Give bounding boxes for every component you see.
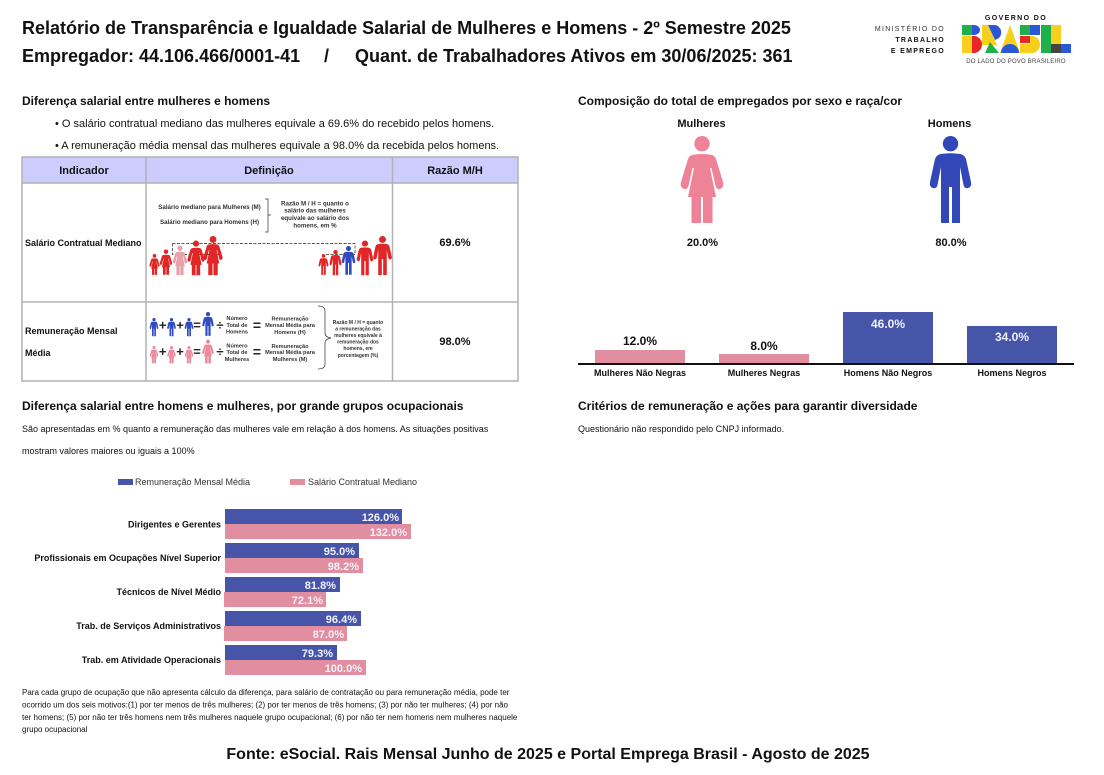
text: explicação: mostram valores maiores ou iguais a 100% (22, 446, 195, 456)
panel: composição (578, 94, 1074, 378)
table: indicadores: Remuneração Mensal (25, 326, 118, 336)
diagram: remuneração média: Mulheres (225, 357, 249, 363)
logo: Governo do Brasil (962, 15, 1071, 65)
bar chart: sexo e raça: 46.0% (871, 317, 905, 331)
logo: Ministério do Trabalho e Emprego: MINISTÉRIO DO (875, 24, 945, 33)
diagram: remuneração média: + (176, 318, 184, 332)
bar chart: sexo e raça: 12.0% (623, 334, 657, 348)
diagram: remuneração média: = (253, 344, 261, 360)
text: nota de rodapé (22, 688, 518, 734)
title: Relatório de Transparência e Igualdade Salarial de Mulheres e Homens - 2º Semestre 2025 (22, 18, 791, 38)
logo: Governo do Brasil: GOVERNO DO (985, 15, 1047, 22)
title: / (324, 46, 329, 66)
text: nota de rodapé: ocorrido um dos seis motivos:(1) por ter menos de três mulheres; (2) por ter menos de três homens; (3) por não ter mulheres; (4) por não (22, 700, 509, 710)
diagram: remuneração média: Remuneração (272, 316, 309, 322)
title: Quant. de Trabalhadores Ativos em 30/06/2025: 361 (355, 46, 793, 66)
logo: Governo do Brasil: DO LADO DO POVO BRASILEIRO (966, 59, 1066, 65)
table: indicadores: 98.0% (439, 336, 471, 348)
logo: Ministério do Trabalho e Emprego (875, 24, 945, 55)
diagram: salário mediano: Razão M / H = quanto o (281, 200, 349, 208)
diagram: remuneração média: Homens (226, 330, 248, 336)
diagram: remuneração média: Mensal Média para (265, 350, 316, 356)
icon: homens: Homens (928, 118, 971, 130)
table: indicadores (22, 157, 518, 381)
bar chart: grupos: Técnicos de Nível Médio (116, 587, 221, 597)
text: bullets: • O salário contratual mediano das mulheres equivale a 69.6% do recebido pelos homens. (55, 118, 494, 130)
diagram: remuneração média: ÷ (216, 344, 224, 359)
diagram: remuneração média: = (193, 344, 201, 359)
bar chart: grupos: 96.4% (326, 614, 357, 626)
heading: grupos ocupacionais: Diferença salarial entre homens e mulheres, por grande grupos ocupacionais (22, 399, 464, 413)
icon: mulheres (677, 118, 726, 249)
table: indicadores: 69.6% (439, 237, 471, 249)
diagram: remuneração média: Mensal Média para (265, 323, 316, 329)
diagram: salário mediano: homens, em % (293, 222, 337, 230)
bar chart: grupos: 79.3% (302, 648, 333, 660)
bar chart: sexo e raça: Mulheres Negras (728, 368, 800, 378)
legend: Remuneração Mensal Média (135, 477, 250, 487)
diagram: salário mediano: equivale ao salário dos (281, 215, 350, 222)
diagram: remuneração média: homens, em (343, 346, 373, 352)
diagram: remuneração média: a remuneração das (335, 326, 381, 332)
diagram: remuneração média: Número (226, 316, 248, 322)
table: indicadores: Média (25, 348, 52, 358)
bar chart: sexo e raça: 8.0% (750, 339, 778, 353)
bar chart: sexo e raça: Homens Não Negros (844, 368, 932, 378)
title (22, 18, 793, 66)
diagram: remuneração média: mulheres equivale à (334, 333, 382, 339)
diagram: remuneração média: Número (226, 344, 248, 350)
bar chart: grupos (34, 509, 411, 675)
diagram: remuneração média: = (253, 317, 261, 333)
title: Empregador: 44.106.466/0001-41 (22, 46, 300, 66)
diagram: remuneração média (150, 306, 383, 369)
heading: diferença salarial: Diferença salarial entre mulheres e homens (22, 94, 270, 108)
diagram: salário mediano: Salário mediano para Mulheres (M) (158, 204, 261, 211)
text: nota de rodapé: ter homens; (5) por não ter três homens nem três mulheres naquele grupo ocupacional; (6) por não ter nem homens nem mulheres naquele (22, 713, 518, 722)
heading: critérios: Critérios de remuneração e ações para garantir diversidade (578, 399, 918, 413)
table: indicadores: Salário Contratual Mediano (25, 238, 142, 248)
icon: mulheres: Mulheres (677, 118, 726, 130)
diagram: remuneração média: porcentagem (%) (338, 353, 379, 359)
heading: composição: Composição do total de empregados por sexo e raça/cor (578, 94, 902, 108)
text: bullets: • A remuneração média mensal das mulheres equivale a 98.0% da recebida pelos homens. (55, 140, 499, 152)
bar chart: grupos: Trab. em Atividade Operacionais (82, 655, 221, 665)
bar chart: grupos: 72.1% (292, 595, 323, 607)
text: bullets (55, 118, 499, 152)
text: nota de rodapé: Para cada grupo de ocupação que não apresenta cálculo da diferença, para salário de contratação ou para remuneração média, pode ter (22, 688, 510, 697)
diagram: salário mediano (149, 199, 392, 275)
bar chart: grupos: Profissionais em Ocupações Nível Superior (34, 553, 221, 563)
diagram: remuneração média: + (176, 344, 184, 359)
icon: mulheres: 20.0% (687, 237, 718, 249)
panel: diferença salarial (22, 94, 518, 381)
diagram: remuneração média: Total de (226, 350, 248, 356)
bar chart: sexo e raça: Homens Negros (977, 368, 1047, 378)
bar chart: grupos: Trab. de Serviços Administrativos (76, 621, 221, 631)
bar chart: grupos: Dirigentes e Gerentes (128, 520, 221, 530)
diagram: remuneração média: Mulheres (M) (273, 357, 307, 363)
panel: critérios (578, 399, 918, 434)
diagram: remuneração média: ÷ (216, 318, 224, 332)
text: explicação: São apresentadas em % quanto a remuneração das mulheres vale em relação à dos homens. As situações positivas (22, 424, 489, 434)
legend (118, 477, 417, 487)
bar chart: sexo e raça: Mulheres Não Negras (594, 368, 686, 378)
diagram: remuneração média: remuneração dos (337, 340, 379, 346)
logo: Ministério do Trabalho e Emprego: TRABALHO (895, 37, 945, 44)
diagram: remuneração média: Razão M / H = quanto (333, 320, 383, 326)
bar chart: grupos: 87.0% (313, 629, 344, 641)
text: explicação (22, 424, 489, 456)
diagram: remuneração média: + (159, 344, 167, 359)
diagram: remuneração média: Remuneração (272, 344, 309, 350)
icon: homens: 80.0% (935, 237, 967, 249)
bar chart: sexo e raça (578, 312, 1074, 378)
table: indicadores: Razão M/H (427, 165, 483, 177)
icon: homens (928, 118, 971, 249)
diagram: salário mediano: Salário mediano para Homens (H) (160, 219, 259, 226)
table: indicadores: Indicador (59, 165, 109, 177)
legend: Salário Contratual Mediano (308, 477, 417, 487)
bar chart: grupos: 126.0% (362, 512, 399, 524)
table: indicadores: Definição (244, 165, 294, 177)
footer: fonte: Fonte: eSocial. Rais Mensal Junho de 2025 e Portal Emprega Brasil - Agosto de 2025 (226, 746, 870, 763)
diagram: remuneração média: + (159, 318, 167, 332)
logo: Ministério do Trabalho e Emprego: E EMPREGO (891, 48, 945, 55)
text: nota de rodapé: grupo ocupacional (22, 725, 88, 734)
bar chart: grupos: 132.0% (370, 527, 407, 539)
diagram: remuneração média: Total de (226, 323, 248, 329)
panel: grupos ocupacionais (22, 399, 518, 734)
bar chart: sexo e raça: 34.0% (995, 330, 1029, 344)
diagram: salário mediano: salário das mulheres (284, 208, 346, 214)
bar chart: grupos: 81.8% (305, 580, 336, 592)
bar chart: grupos: 95.0% (324, 546, 355, 558)
bar chart: grupos: 98.2% (328, 561, 359, 573)
diagram: remuneração média: Homens (H) (274, 330, 306, 336)
diagram: remuneração média: = (193, 318, 201, 332)
text: critérios: Questionário não respondido pelo CNPJ informado. (578, 424, 784, 434)
bar chart: grupos: 100.0% (325, 663, 362, 675)
